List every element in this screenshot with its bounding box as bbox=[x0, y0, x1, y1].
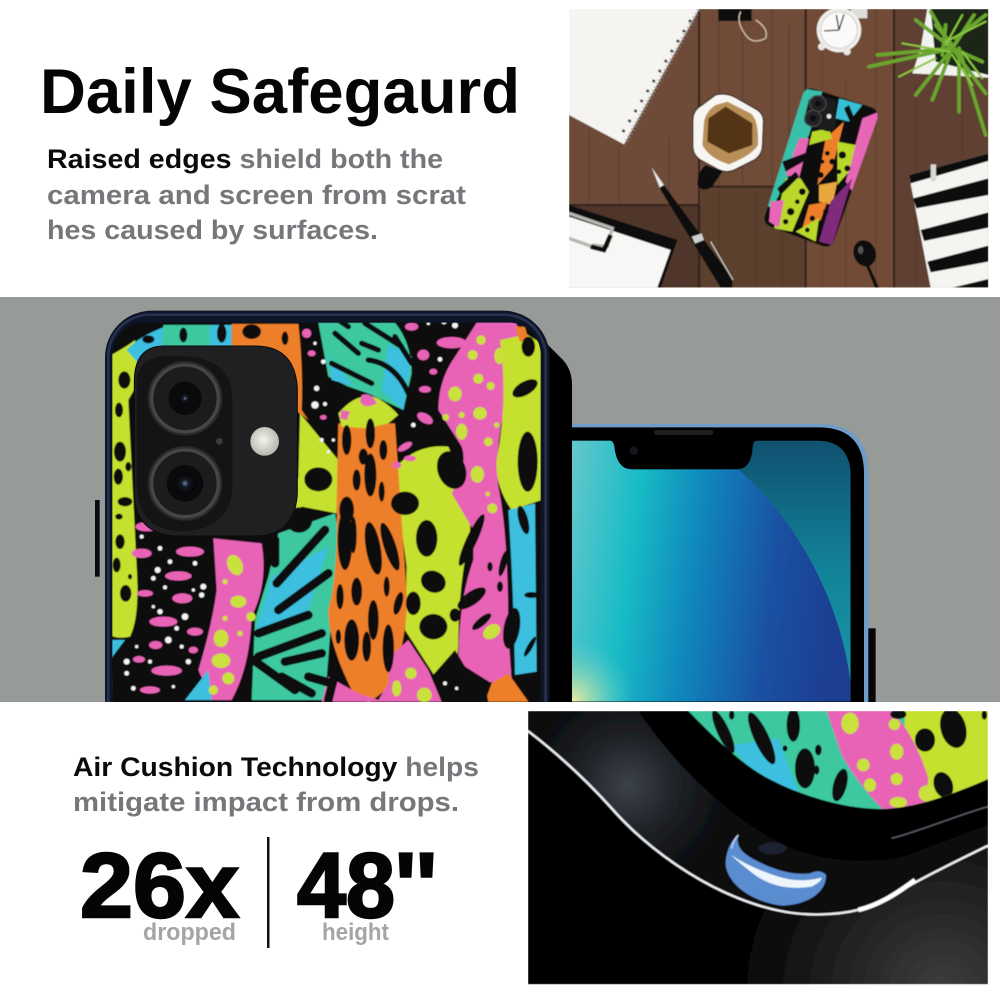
stat: 26x dropped: dropped bbox=[143, 919, 236, 946]
phone body bbox=[560, 424, 868, 703]
spoon bbox=[852, 240, 880, 288]
phone case back bbox=[95, 311, 550, 744]
grey band bbox=[0, 297, 1000, 702]
stat: 48 inches height: 48'' bbox=[297, 835, 437, 937]
text block: safeguard description: hes caused by surfaces. bbox=[47, 215, 378, 245]
case edge shadow bbox=[548, 344, 572, 702]
stat: 48 inches height: height bbox=[322, 919, 389, 946]
front phone bbox=[538, 335, 876, 705]
wood planks bbox=[569, 9, 988, 288]
binder clip and string bbox=[718, 9, 766, 41]
white dots bbox=[124, 319, 458, 691]
clipboard bbox=[569, 205, 677, 288]
striped notebook bbox=[909, 153, 988, 288]
camera module bbox=[134, 346, 297, 536]
mini phone case bbox=[764, 88, 878, 247]
side button bbox=[95, 500, 100, 577]
text block: air cushion description: Air Cushion Technology helps bbox=[73, 752, 479, 782]
notebook bbox=[569, 9, 699, 144]
coffee cup bbox=[693, 94, 763, 190]
photo: air cushion corner close-up bbox=[528, 706, 992, 984]
printed pattern bbox=[103, 319, 545, 727]
pen bbox=[652, 167, 733, 288]
rim highlight bbox=[528, 731, 988, 914]
text block: safeguard description bbox=[47, 144, 466, 245]
lens: top bbox=[148, 361, 222, 436]
case frame bbox=[105, 311, 550, 744]
photo: desk flat lay bbox=[569, 8, 988, 288]
text block: safeguard description: camera and screen from scrat bbox=[47, 180, 466, 210]
printed pattern close-up bbox=[688, 711, 988, 810]
text block: air cushion description bbox=[73, 752, 479, 817]
case body bbox=[528, 711, 988, 914]
divider bbox=[267, 837, 270, 948]
text block: air cushion description: mitigate impact from drops. bbox=[73, 787, 459, 817]
pink dashes on black bbox=[132, 323, 467, 694]
text block: safeguard description: Raised edges shield both the bbox=[47, 144, 443, 174]
alarm clock bbox=[817, 8, 867, 55]
screen bbox=[570, 438, 853, 705]
yellow dots on pink bbox=[209, 335, 504, 702]
air cushion droplet bbox=[726, 835, 826, 906]
title: Daily Safegaurd bbox=[40, 57, 520, 127]
lens: bottom bbox=[148, 446, 222, 521]
colour blobs bbox=[103, 320, 542, 703]
flash bbox=[250, 427, 279, 456]
stat: 26x dropped: 26x bbox=[80, 835, 239, 937]
plant bbox=[869, 9, 988, 135]
side button bbox=[868, 628, 876, 703]
black spots and stripes bbox=[113, 324, 540, 702]
speaker and camera bbox=[654, 430, 713, 435]
